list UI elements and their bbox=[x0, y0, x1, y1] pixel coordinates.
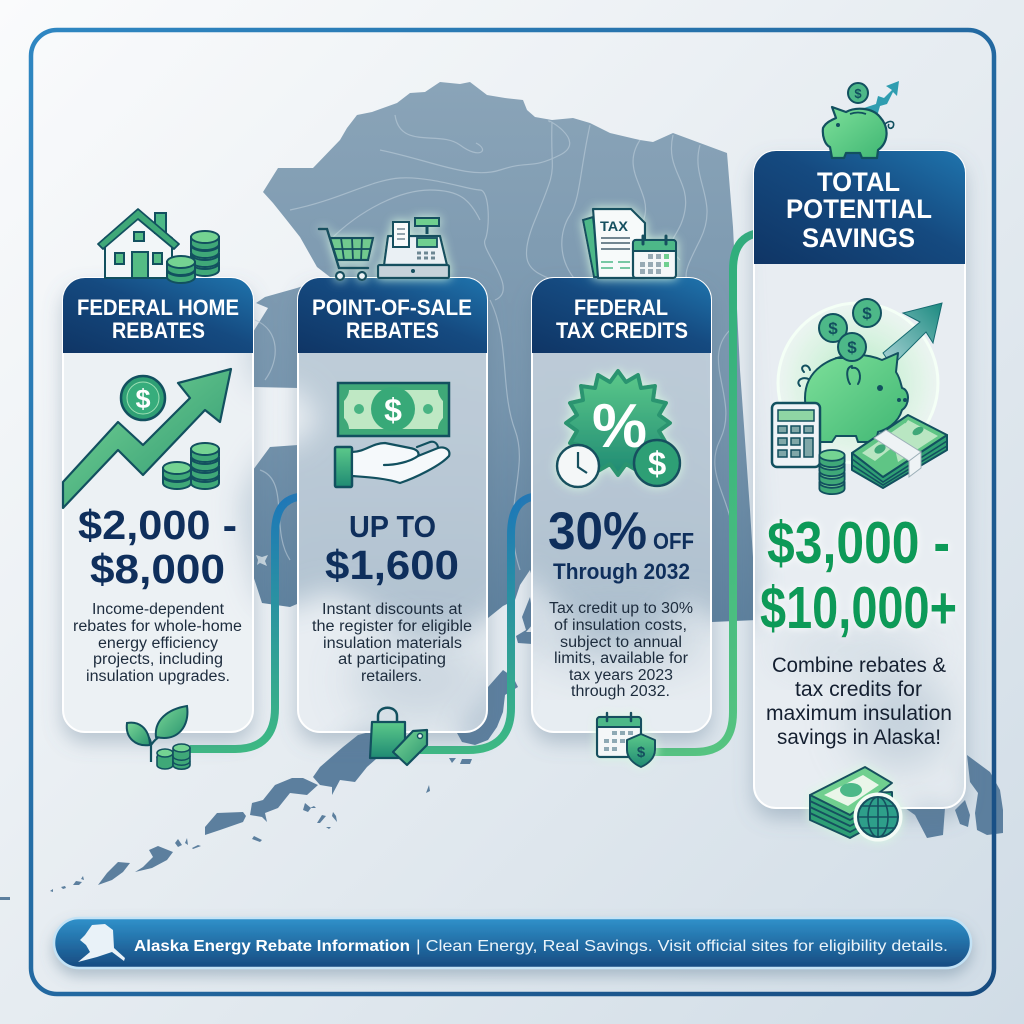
amount: $3,000 - $10,000+: $10,000+ bbox=[760, 575, 957, 641]
description: through 2032. bbox=[571, 683, 670, 700]
header: federal home rebates: REBATES bbox=[112, 318, 205, 343]
header: federal tax credits bbox=[532, 278, 711, 353]
footer text: Alaska Energy Rebate Information bbox=[134, 938, 410, 955]
description: Instant discounts at bbox=[322, 601, 463, 618]
amount: $2,000 - $8,000: $8,000 bbox=[90, 546, 225, 592]
description bbox=[312, 601, 472, 685]
icon: cash register bbox=[378, 218, 449, 278]
icon: percent badge with clock and coin: $ bbox=[648, 445, 666, 482]
description: Income-dependent bbox=[92, 601, 225, 618]
amount: up to $1,600 bbox=[325, 509, 459, 588]
description: tax years 2023 bbox=[569, 667, 673, 684]
panel: federal home rebates bbox=[63, 278, 253, 732]
panel: federal tax credits bbox=[532, 278, 711, 732]
description bbox=[766, 654, 952, 749]
panel: total potential savings bbox=[754, 151, 965, 808]
amount: up to $1,600: $1,600 bbox=[325, 542, 459, 588]
icon: piggy bank with arrow, calculator, cash bbox=[772, 299, 947, 494]
icon: house with coins bbox=[98, 209, 219, 283]
header: total potential savings bbox=[754, 151, 965, 264]
header: total potential savings: POTENTIAL bbox=[786, 194, 932, 224]
description: projects, including bbox=[93, 651, 223, 668]
icon: cash stack and globe bbox=[810, 767, 900, 839]
footer text bbox=[134, 938, 948, 955]
icon: growth arrow with coins: $ bbox=[135, 384, 151, 414]
icon: percent badge with clock and coin: % bbox=[592, 392, 647, 461]
icon: calendar and shield bbox=[597, 713, 655, 767]
icon: piggy bank with arrow, calculator, cash: $ bbox=[847, 338, 857, 357]
description: maximum insulation bbox=[766, 702, 952, 725]
description: energy efficiency bbox=[98, 635, 218, 652]
description: subject to annual bbox=[560, 634, 682, 651]
amount: $3,000 - $10,000+: $3,000 - bbox=[767, 510, 950, 576]
description: Combine rebates & bbox=[772, 654, 946, 677]
card shadows bbox=[63, 151, 965, 808]
icon: cash over open hand bbox=[335, 383, 449, 487]
amount: 30% off through 2032: Through 2032 bbox=[553, 559, 690, 584]
amount: 30% off through 2032: OFF bbox=[653, 528, 694, 554]
description: limits, available for bbox=[554, 650, 688, 667]
header: federal tax credits: FEDERAL bbox=[574, 295, 668, 320]
description bbox=[549, 600, 693, 700]
description bbox=[73, 601, 242, 685]
footer text: | Clean Energy, Real Savings. Visit official sites for eligibility details. bbox=[416, 938, 948, 955]
icon: tax form and calendar bbox=[583, 209, 676, 278]
map of Alaska bbox=[0, 82, 1003, 900]
connector: card 1 to card 2 bbox=[190, 497, 298, 749]
description: retailers. bbox=[361, 668, 422, 685]
amount: 30% off through 2032 bbox=[548, 502, 694, 584]
icon: shopping cart bbox=[319, 229, 373, 280]
description: insulation materials bbox=[323, 635, 462, 652]
header: total potential savings: SAVINGS bbox=[802, 223, 915, 253]
description: Tax credit up to 30% bbox=[549, 600, 693, 617]
amount: $2,000 - $8,000 bbox=[78, 502, 237, 592]
description: rebates for whole-home bbox=[73, 618, 242, 635]
icon: leaves and coins bbox=[127, 706, 190, 769]
icon: piggy bank with coin and arrow bbox=[823, 81, 899, 158]
description: tax credits for bbox=[795, 678, 922, 701]
header: federal home rebates bbox=[63, 278, 253, 353]
panel: point-of-sale rebates bbox=[298, 278, 487, 732]
icon: Alaska silhouette bbox=[78, 924, 125, 962]
description: of insulation costs, bbox=[554, 617, 687, 634]
footer banner bbox=[54, 918, 971, 968]
header: point-of-sale rebates: POINT-OF-SALE bbox=[312, 295, 472, 320]
amount: up to $1,600: UP TO bbox=[349, 509, 436, 544]
icon: piggy bank with arrow, calculator, cash: $ bbox=[862, 304, 872, 323]
amount: 30% off through 2032: 30% bbox=[548, 502, 647, 561]
header: federal tax credits: TAX CREDITS bbox=[556, 318, 688, 343]
header: point-of-sale rebates: REBATES bbox=[346, 318, 439, 343]
header: federal home rebates: FEDERAL HOME bbox=[77, 295, 239, 320]
amount: $2,000 - $8,000: $2,000 - bbox=[78, 502, 237, 548]
icon: growth arrow with coins bbox=[63, 369, 231, 508]
connector: card 2 to card 3 bbox=[420, 497, 532, 750]
icon: tax form and calendar: TAX bbox=[600, 218, 629, 234]
frosted map behind cards bbox=[230, 353, 964, 807]
icon: shopping bag and price tag bbox=[370, 708, 427, 765]
connector: card 3 to card 4 bbox=[655, 234, 754, 752]
icon: cash over open hand: $ bbox=[384, 392, 402, 428]
description: insulation upgrades. bbox=[86, 668, 230, 685]
description: at participating bbox=[338, 651, 446, 668]
description: savings in Alaska! bbox=[777, 726, 941, 749]
icon: calendar and shield: $ bbox=[637, 744, 646, 761]
amount: $3,000 - $10,000+ bbox=[760, 510, 957, 641]
header: total potential savings: TOTAL bbox=[817, 167, 900, 197]
description: the register for eligible bbox=[312, 618, 472, 635]
icon: piggy bank with coin and arrow: $ bbox=[854, 86, 862, 101]
header: point-of-sale rebates bbox=[298, 278, 487, 353]
icon: piggy bank with arrow, calculator, cash: $ bbox=[828, 319, 838, 338]
icon: percent badge with clock and coin bbox=[557, 371, 680, 487]
